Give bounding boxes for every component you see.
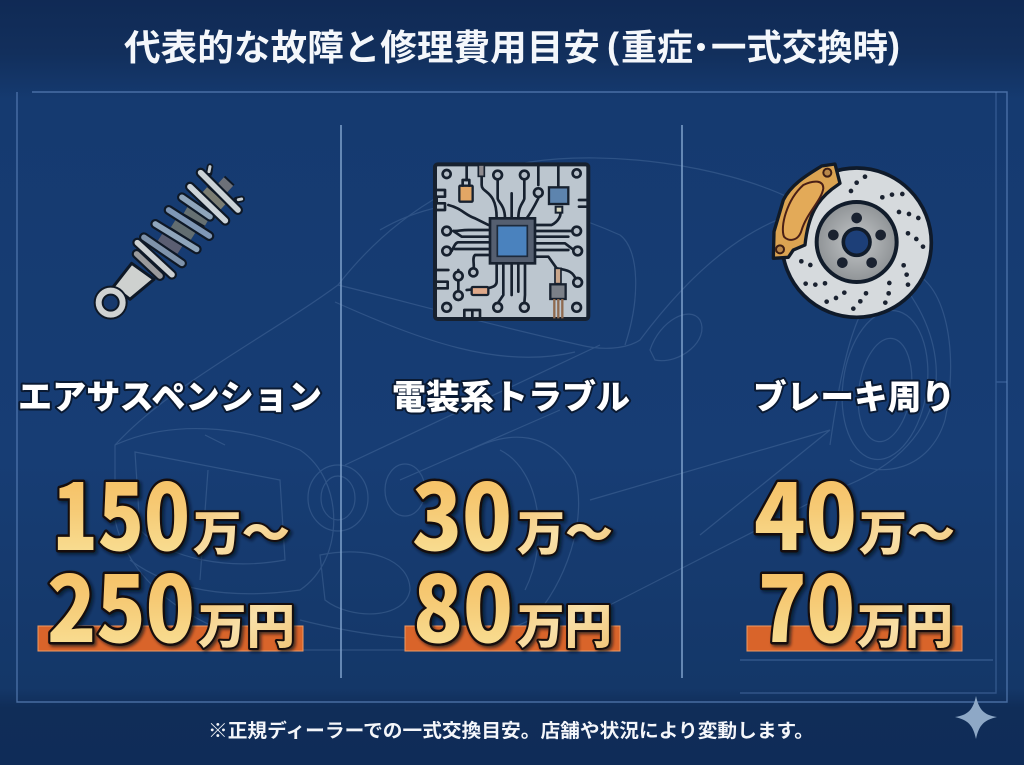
heading: air suspension: エアサスペンション [18, 370, 322, 419]
price highlight bar [747, 626, 962, 651]
title [124, 19, 900, 71]
price highlight bar [38, 626, 303, 651]
price: 30万～80万円: 万円 [517, 587, 612, 657]
price: 30万～80万円: 30 [412, 445, 512, 577]
price: 40万～70万円: 万～ [859, 494, 955, 564]
title: 一式交換時 [711, 19, 888, 71]
heading: electrical trouble: 電装系トラブル [392, 370, 630, 419]
price highlight bar [405, 626, 620, 651]
panel: brakes [747, 164, 962, 669]
price: 40万～70万円: 万円 [857, 587, 953, 657]
footnote: ※正規ディーラーでの一式交換目安。店舗や状況により変動します。 [208, 716, 814, 743]
blueprint car outline [115, 158, 951, 650]
column divider 1 [340, 125, 342, 678]
price: 150万～250万円: 万～ [193, 494, 290, 564]
title: ( [607, 25, 619, 66]
price: 40万～70万円: 40 [754, 445, 857, 577]
column divider 2 [681, 125, 683, 678]
heading: brakes: ブレーキ周り [753, 370, 955, 419]
panel: electrical trouble [392, 164, 630, 669]
price: 150万～250万円: 万円 [198, 587, 295, 657]
title: 重症 [621, 19, 693, 71]
price: 40万～70万円: 70 [758, 537, 855, 669]
price: 150万～250万円: 250 [47, 537, 195, 669]
frame lines [17, 92, 1007, 702]
sparkle icon [955, 696, 997, 739]
title: 代表的な故障と修理費用目安 [124, 19, 600, 71]
panel: air suspension [18, 167, 322, 669]
price: 40万～70万円 [754, 445, 955, 669]
price: 150万～250万円: 150 [52, 445, 190, 577]
icon: circuit board [435, 164, 588, 319]
price: 30万～80万円: 万～ [517, 494, 613, 564]
icon: suspension strut [99, 167, 242, 315]
price: 150万～250万円 [47, 445, 295, 669]
price: 30万～80万円 [412, 445, 613, 669]
icon: brake disc [773, 164, 931, 317]
title: ) [888, 25, 900, 66]
price: 30万～80万円: 80 [413, 537, 513, 669]
